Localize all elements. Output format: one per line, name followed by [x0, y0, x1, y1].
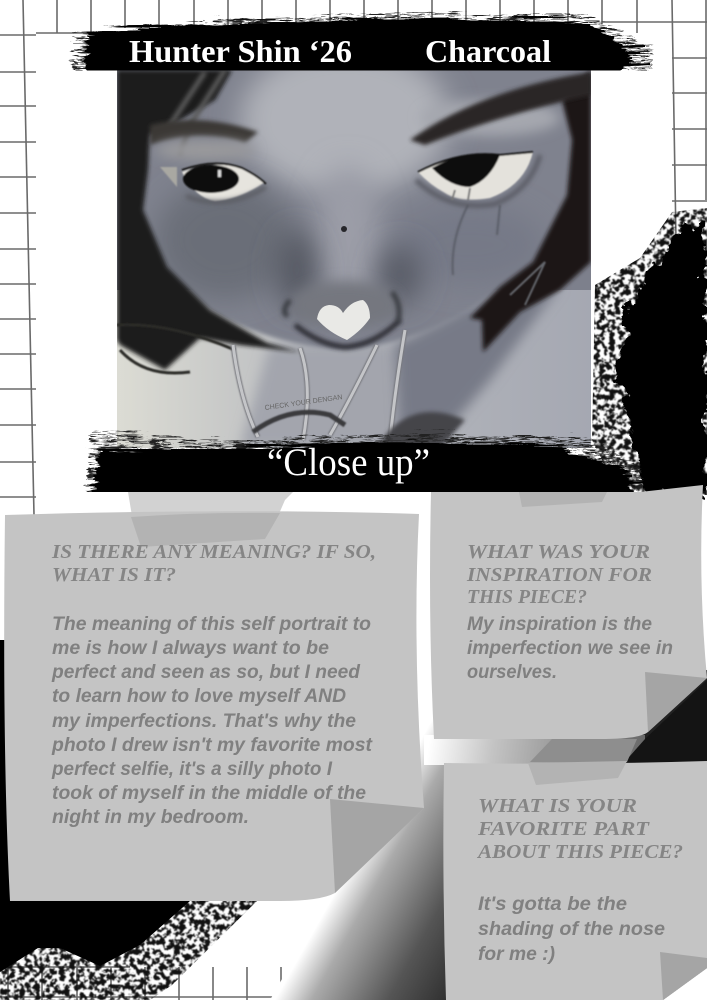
answer: for me :)	[478, 944, 555, 965]
question: WHAT IS YOUR	[478, 795, 637, 817]
tape	[530, 739, 637, 762]
answer	[467, 614, 673, 683]
charcoal blot: bottom left	[0, 640, 258, 1000]
answer: photo I drew isn't my favorite most	[51, 735, 373, 756]
answer: me is how I always want to be	[52, 638, 329, 659]
answer	[51, 614, 373, 828]
question	[51, 541, 376, 586]
right hair	[470, 70, 591, 352]
mole	[341, 226, 347, 232]
note: favorite part	[443, 739, 707, 1000]
question: THIS PIECE?	[467, 586, 587, 608]
right eyebrow	[410, 72, 591, 145]
answer: night in my bedroom.	[52, 807, 249, 828]
portrait drawing: CHECK YOUR DENGAN	[264, 394, 343, 412]
answer	[478, 894, 665, 965]
tape	[128, 492, 293, 516]
left hair	[117, 70, 300, 370]
portrait drawing	[117, 45, 591, 450]
nose heart	[317, 300, 370, 340]
left eyebrow	[150, 120, 258, 145]
note: meaning	[4, 492, 424, 901]
tape overlay	[519, 492, 607, 507]
paper	[4, 511, 424, 901]
question: FAVORITE PART	[477, 818, 651, 840]
answer: The meaning of this self portrait to	[52, 614, 371, 635]
answer: shading of the nose	[478, 919, 665, 940]
question: WHAT IS IT?	[52, 564, 176, 586]
answer: My inspiration is the	[467, 614, 652, 635]
question: ABOUT THIS PIECE?	[476, 841, 683, 863]
answer: It's gotta be the	[478, 894, 627, 915]
title: medium: Charcoal	[425, 33, 551, 69]
title: artist name: Hunter Shin ‘26	[129, 33, 352, 69]
nose outline	[295, 320, 400, 347]
note: inspiration	[430, 485, 707, 739]
tape overlay	[528, 761, 627, 785]
shirt graphic	[253, 412, 345, 432]
page fold	[645, 672, 707, 732]
question: WHAT WAS YOUR	[467, 541, 650, 563]
charcoal blot: right side	[592, 208, 707, 495]
question	[476, 795, 683, 863]
answer: imperfection we see in	[467, 638, 673, 659]
page fold	[660, 952, 707, 1000]
tape overlay	[131, 513, 280, 547]
question: INSPIRATION FOR	[466, 564, 652, 586]
top brush stroke banner	[72, 12, 652, 76]
answer: ourselves.	[467, 662, 557, 683]
question: IS THERE ANY MEANING? IF SO,	[51, 541, 376, 563]
answer: perfect selfie, it's a silly photo I	[51, 759, 333, 780]
answer: perfect and seen as so, but I need	[51, 662, 360, 683]
bottom brush stroke banner	[87, 432, 650, 498]
answer: my imperfections. That's why the	[52, 711, 356, 732]
page fold	[330, 799, 424, 893]
paper	[443, 761, 707, 1000]
hoodie strings	[233, 330, 405, 440]
left eye	[160, 163, 266, 202]
artwork title: “Close up”	[267, 441, 430, 484]
charcoal diagonal stroke	[270, 670, 707, 1000]
corner background	[663, 968, 707, 1000]
question	[466, 541, 652, 608]
face	[190, 290, 496, 352]
neck shadow	[240, 345, 420, 448]
right eye	[416, 152, 540, 275]
paper	[430, 485, 707, 739]
answer: to learn how to love myself AND	[52, 686, 346, 707]
answer: took of myself in the middle of the	[52, 783, 366, 804]
